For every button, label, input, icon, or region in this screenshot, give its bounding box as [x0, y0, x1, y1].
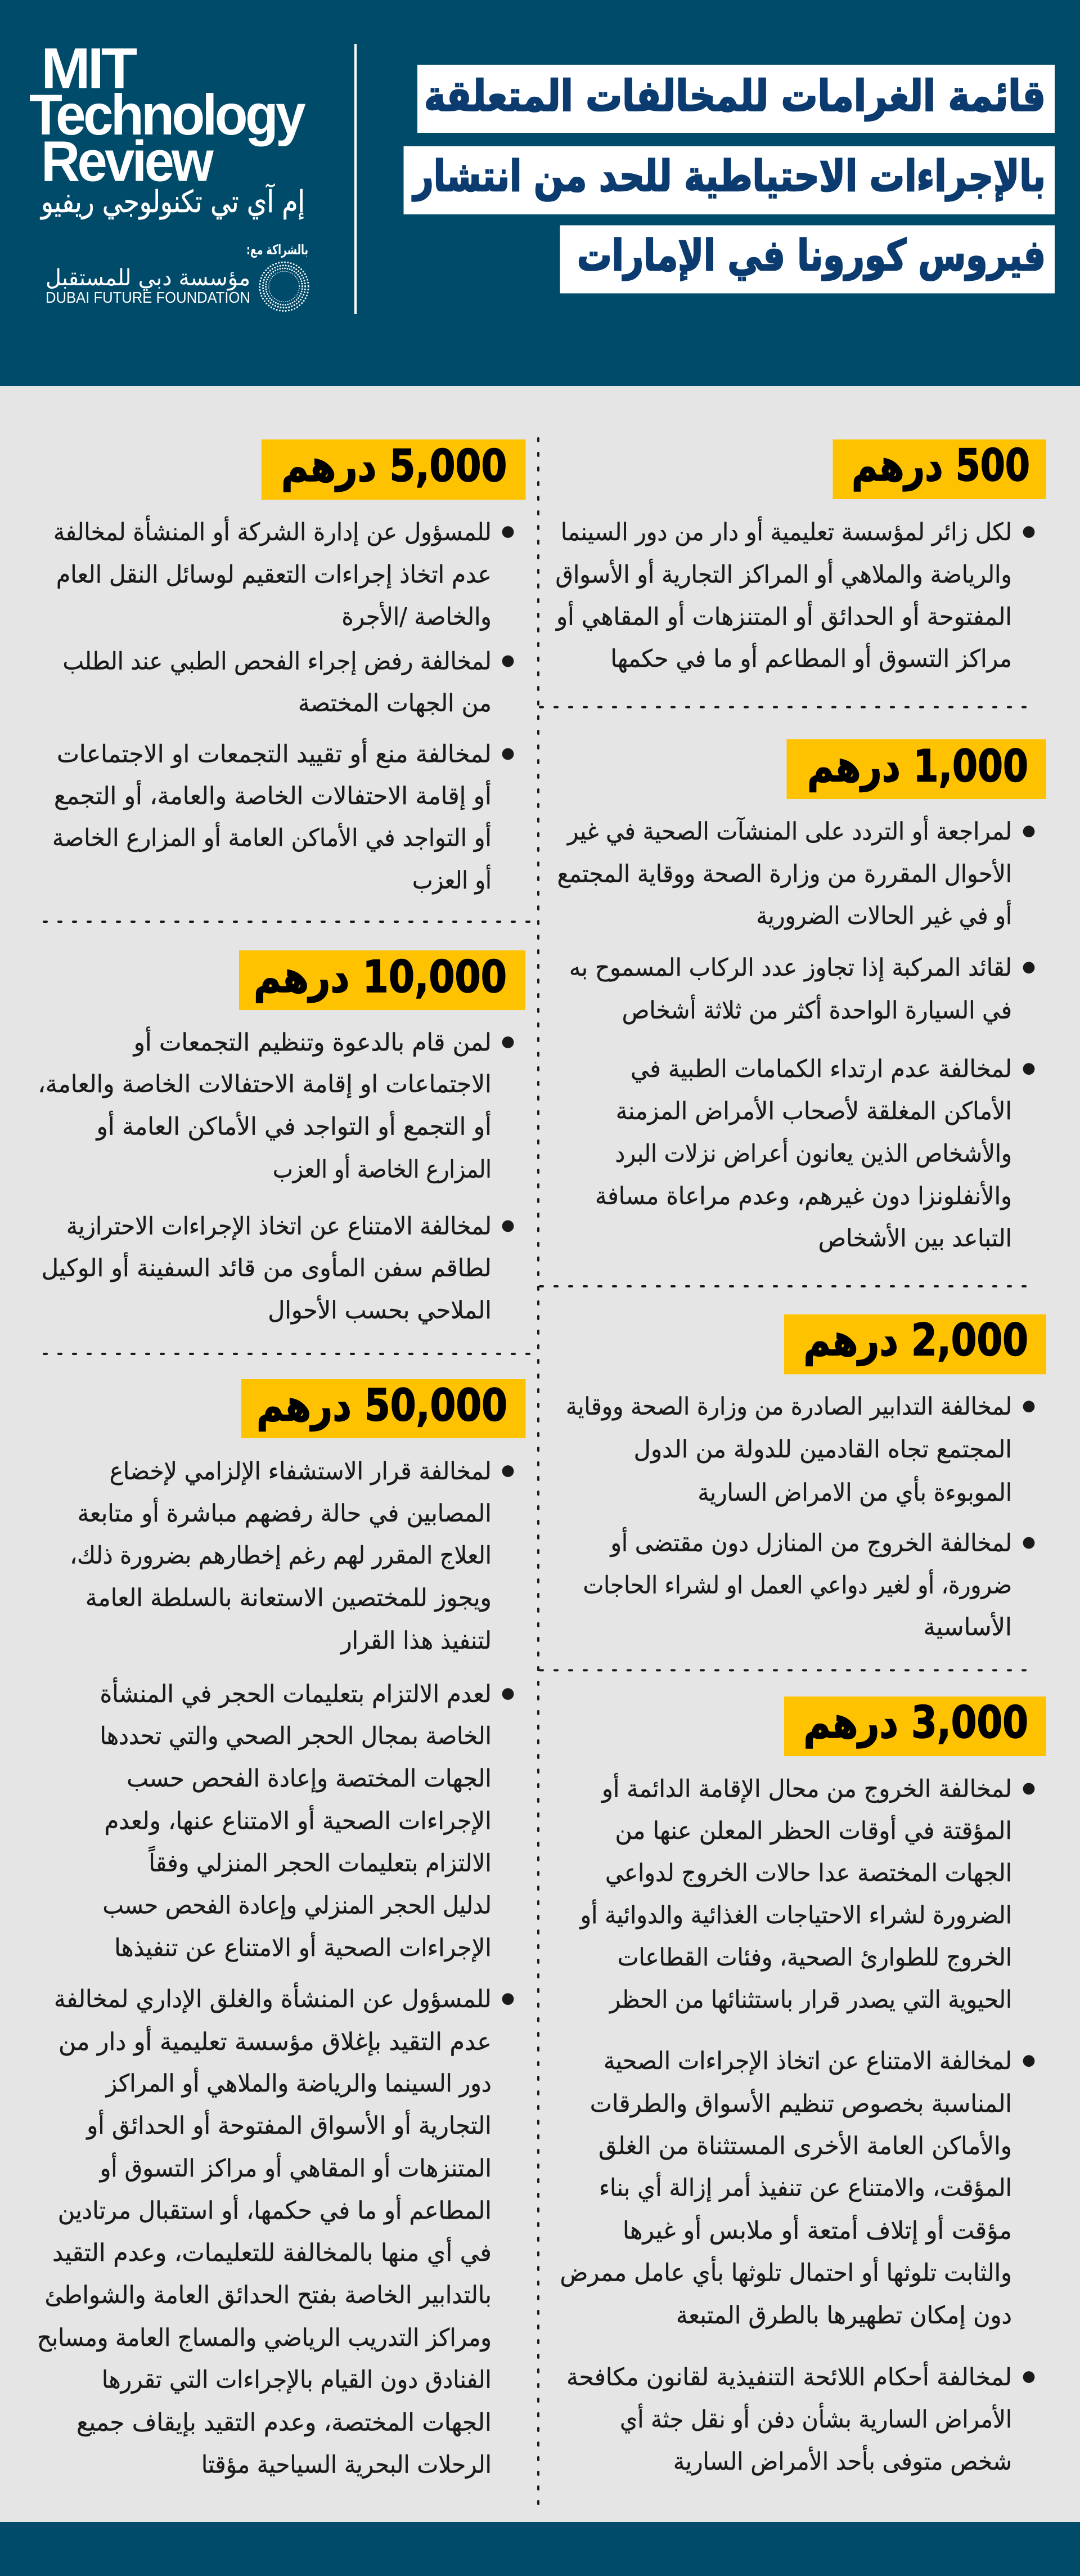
item	[583, 1527, 1034, 1641]
item: التجارية أو الأسواق المفتوحة أو الحدائق أو	[86, 2110, 492, 2140]
item: عدم التقيد بإغلاق مؤسسة تعليمية أو دار من	[58, 2026, 492, 2056]
item: الحيوية التي يصدر قرار باستثنائها من الحظر	[609, 1986, 1012, 2014]
logo: MIT Technology Review: MIT	[41, 37, 137, 101]
item: لمراجعة أو التردد على المنشآت الصحية في غير	[566, 815, 1012, 846]
item: الإجراءات الصحية أو الامتناع عنها، ولعدم	[105, 1805, 492, 1835]
item	[38, 1026, 514, 1184]
badge: 2,000: 2,000 درهم	[803, 1316, 1028, 1366]
title	[404, 65, 1055, 293]
item	[579, 1772, 1034, 2014]
item: المزارع الخاصة أو العزب	[273, 1154, 492, 1184]
item: لمخالفة الامتناع عن اتخاذ الإجراءات الاحترازية	[66, 1212, 492, 1240]
item: لطاقم سفن المأوى من قائد السفينة أو الوكيل	[42, 1251, 492, 1282]
item: أو العزب	[412, 864, 492, 895]
item	[566, 1393, 1034, 1507]
item	[595, 1055, 1034, 1253]
logo: MIT Technology Review: Review	[41, 129, 214, 194]
icon: dotted rings	[260, 262, 308, 311]
logo: MIT Technology Review: Technology	[29, 83, 306, 147]
item: لتنفيذ هذا القرار	[340, 1627, 492, 1655]
item: والثابت تلوثها أو احتمال تلوثها بأي عامل ممرض	[560, 2255, 1012, 2287]
item: ومراكز التدريب الرياضي والمساج العامة ومسابح	[37, 2324, 492, 2352]
item: التباعد بين الأشخاص	[818, 1223, 1012, 1253]
item: المؤقت، والامتناع عن تنفيذ أمر إزالة أي بناء	[599, 2172, 1012, 2202]
badge: 10,000: 10,000 درهم	[254, 952, 507, 1003]
item: الجهات المختصة وإعادة الفحص حسب	[127, 1765, 492, 1793]
footer band	[0, 2522, 1080, 2576]
item: العلاج المقرر لهم رغم إخطارهم بضرورة ذلك،	[70, 1542, 492, 1570]
item: الجهات المختصة، وعدم التقيد بإيقاف جميع	[76, 2409, 492, 2437]
item: دون إمكان تطهيرها بالطرق المتبعة	[676, 2301, 1012, 2330]
panel: 2,000 dirham fine	[566, 1314, 1046, 1641]
item: ضرورة، أو لغير دواعي العمل او لشراء الحاجات	[583, 1569, 1012, 1600]
item: لمخالفة أحكام اللائحة التنفيذية لقانون مكافحة	[566, 2361, 1012, 2391]
item: الضرورة لشراء الاحتياجات الغذائية والدوائية أو	[579, 1899, 1012, 1929]
badge: 1,000: 1,000 درهم	[807, 742, 1028, 792]
item: مراكز التسوق أو المطاعم أو ما في حكمها	[611, 643, 1012, 673]
item	[566, 2361, 1034, 2476]
panel: 50,000 dirham fine	[37, 1379, 525, 2479]
item: الملاحي بحسب الأحوال	[268, 1295, 492, 1325]
item: الأساسية	[924, 1612, 1012, 1641]
item: شخص متوفى بأحد الأمراض السارية	[673, 2444, 1012, 2476]
item: والرياضة والملاهي أو المراكز التجارية أو الأسواق	[556, 558, 1012, 589]
badge: 5,000: 5,000 درهم	[281, 441, 507, 492]
item: والأنفلونزا دون غيرهم، وعدم مراعاة مسافة	[595, 1181, 1012, 1210]
item: الجهات المختصة عدا حالات الخروج لدواعي	[605, 1859, 1012, 1887]
item: الخروج للطوارئ الصحية، وفئات القطاعات	[618, 1944, 1012, 1972]
partner logo: Dubai Future Foundation: مؤسسة دبي للمستقبل	[46, 265, 250, 291]
item: الموبوءة بأي من الامراض السارية	[698, 1475, 1012, 1507]
item: لمخالفة منع أو تقييد التجمعات او الاجتماعات	[57, 738, 492, 768]
item: من الجهات المختصة	[298, 689, 492, 717]
item: المؤقتة في أوقات الحظر المعلن عنها من	[615, 1815, 1012, 1845]
logo: MIT Technology Review: إم آي تي تكنولوجي ريفيو	[39, 183, 305, 219]
header divider	[354, 44, 357, 314]
item	[63, 647, 514, 717]
item: في السيارة الواحدة أكثر من ثلاثة أشخاص	[622, 994, 1012, 1025]
item: لمخالفة التدابير الصادرة من وزارة الصحة ووقاية	[566, 1393, 1012, 1421]
panel: 3,000 dirham fine	[560, 1697, 1046, 2476]
item	[560, 2047, 1034, 2330]
item	[555, 516, 1034, 673]
item	[53, 515, 514, 631]
partner logo: Dubai Future Foundation: بالشراكة مع:	[246, 242, 308, 258]
item	[569, 954, 1034, 1025]
item: الأماكن المغلقة لأصحاب الأمراض المزمنة	[616, 1096, 1012, 1125]
item: لمخالفة الخروج من محال الإقامة الدائمة أو	[601, 1772, 1012, 1803]
item: الإجراءات الصحية أو الامتناع عن تنفيذها	[114, 1932, 492, 1962]
badge: 500: 500 درهم	[852, 441, 1030, 491]
item: في أي منها بالمخالفة للتعليمات، وعدم التقيد	[52, 2237, 492, 2267]
item: عدم اتخاذ إجراءات التعقيم لوسائل النقل العام	[56, 560, 492, 589]
item: أو إقامة الاحتفالات الخاصة والعامة، أو التجمع	[54, 780, 492, 810]
partner logo: Dubai Future Foundation: DUBAI FUTURE FOUNDATION	[46, 289, 250, 306]
badge: 50,000: 50,000 درهم	[256, 1381, 507, 1431]
item: لعدم الالتزام بتعليمات الحجر في المنشأة	[100, 1677, 492, 1708]
item: لمخالفة رفض إجراء الفحص الطبي عند الطلب	[63, 647, 492, 675]
item: أو التجمع أو التواجد في الأماكن العامة أو	[96, 1111, 492, 1141]
item: المصابين في حالة رفضهم مباشرة أو متابعة	[78, 1497, 492, 1528]
item: ويجوز للمختصين الاستعانة بالسلطة العامة	[86, 1584, 492, 1612]
item	[52, 738, 514, 895]
partner logo: Dubai Future Foundation	[46, 242, 308, 311]
badge: 3,000: 3,000 درهم	[803, 1698, 1028, 1748]
panel: 5,000 dirham fine	[52, 439, 525, 895]
item: المطاعم أو ما في حكمها، أو استقبال مرتادين	[58, 2194, 492, 2225]
item: لقائد المركبة إذا تجاوز عدد الركاب المسموح به	[569, 954, 1012, 982]
panel: 10,000 dirham fine	[38, 950, 525, 1325]
panel: 500 dirham fine	[555, 439, 1046, 673]
item: الأحوال المقررة من وزارة الصحة ووقاية المجتمع	[557, 859, 1012, 888]
item: الاجتماعات او إقامة الاحتفالات الخاصة والعامة،	[38, 1070, 492, 1098]
item	[557, 815, 1034, 930]
item: الأمراض السارية بشأن دفن أو نقل جثة أي	[620, 2402, 1012, 2434]
item: لمخالفة عدم ارتداء الكمامات الطبية في	[631, 1055, 1012, 1083]
item	[70, 1457, 514, 1655]
item: والأشخاص الذين يعانون أعراض نزلات البرد	[615, 1138, 1012, 1168]
logo: MIT Technology Review	[29, 37, 306, 219]
item	[100, 1677, 514, 1962]
panel: 1,000 dirham fine	[557, 739, 1046, 1253]
item: الرحلات البحرية السياحية مؤقتا	[201, 2451, 492, 2479]
item: لمخالفة الخروج من المنازل دون مقتضى أو	[610, 1527, 1012, 1558]
header band	[0, 0, 1080, 386]
item: لمخالفة قرار الاستشفاء الإلزامي لإخضاع	[110, 1457, 492, 1486]
item: المناسبة بخصوص تنظيم الأسواق والطرقات	[590, 2088, 1012, 2118]
item: المتنزهات أو المقاهي أو مراكز التسوق أو	[99, 2152, 492, 2183]
item: الالتزام بتعليمات الحجر المنزلي وفقاً	[148, 1846, 492, 1877]
item: أو في غير الحالات الضرورية	[756, 900, 1012, 930]
item: لكل زائر لمؤسسة تعليمية أو دار من دور السينما	[561, 516, 1012, 546]
item: والأماكن العامة الأخرى المستثناة من الغلق	[598, 2130, 1012, 2160]
item: والخاصة /الأجرة	[342, 601, 492, 631]
item: الخاصة بمجال الحجر الصحي والتي تحددها	[100, 1722, 492, 1751]
item: لمخالفة الامتناع عن اتخاذ الإجراءات الصحية	[604, 2047, 1012, 2075]
item: دور السينما والرياضة والملاهي أو المراكز	[105, 2067, 492, 2098]
item	[37, 1982, 514, 2479]
item: لدليل الحجر المنزلي وإعادة الفحص حسب	[102, 1892, 492, 1920]
item	[42, 1212, 514, 1325]
item: الفنادق دون القيام بالإجراءات التي تقررها	[102, 2366, 492, 2394]
item: المفتوحة أو الحدائق أو المتنزهات أو المقاهي أو	[555, 601, 1012, 631]
item: لمن قام بالدعوة وتنظيم التجمعات أو	[133, 1026, 492, 1057]
item: بالتدابير الخاصة بفتح الحدائق العامة والشواطئ	[45, 2281, 492, 2309]
item: للمسؤول عن المنشأة والغلق الإداري لمخالفة	[54, 1982, 492, 2013]
item: المجتمع تجاه القادمين للدولة من الدول	[634, 1435, 1012, 1464]
item: للمسؤول عن إدارة الشركة أو المنشأة لمخالفة	[53, 515, 492, 546]
item: أو التواجد في الأماكن العامة أو المزارع الخاصة	[52, 822, 492, 852]
item: مؤقت أو إتلاف أمتعة أو ملابس أو غيرها	[623, 2215, 1012, 2245]
